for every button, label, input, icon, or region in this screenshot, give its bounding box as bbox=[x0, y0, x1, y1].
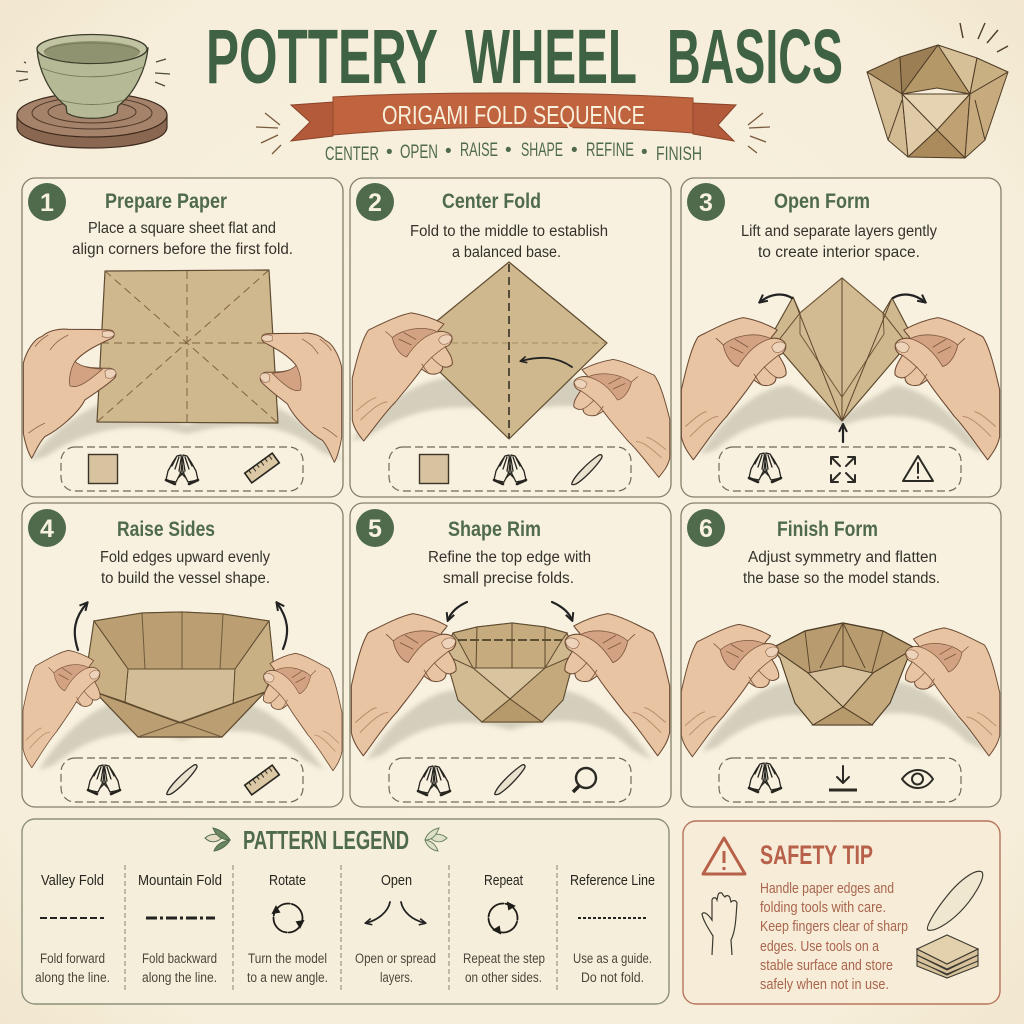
safety text: safely when not in use. bbox=[760, 977, 889, 993]
step number 4 bbox=[28, 509, 66, 547]
panel: step 2 center fold bbox=[350, 178, 671, 497]
icon: bone folder tool bbox=[927, 871, 983, 930]
step keywords: • bbox=[571, 140, 578, 161]
illustration: right hand bbox=[263, 653, 342, 771]
icon: paper stack bbox=[917, 935, 978, 978]
step keywords: • bbox=[641, 142, 648, 163]
tools tray 5 bbox=[389, 758, 631, 802]
ribbon text: ORIGAMI FOLD SEQUENCE bbox=[382, 100, 645, 130]
description 1: Place a square sheet flat and bbox=[88, 220, 276, 237]
step number 6: 6 bbox=[699, 515, 713, 543]
panel: step 6 finish form bbox=[681, 503, 1001, 807]
step number 5: 5 bbox=[368, 515, 382, 543]
step number 6 bbox=[687, 509, 725, 547]
legend item: rotate: Turn the model bbox=[248, 951, 327, 966]
legend item: rotate bbox=[247, 872, 328, 985]
illustration: finished bowl bbox=[772, 623, 915, 725]
icon: hand outline bbox=[702, 893, 737, 955]
legend item: open: Open or spread bbox=[355, 951, 436, 966]
description 1: align corners before the first fold. bbox=[72, 241, 293, 258]
legend item: open: layers. bbox=[380, 970, 413, 985]
step keywords: RAISE bbox=[460, 140, 498, 161]
illustration: right hand bbox=[260, 333, 342, 462]
icon: pot on wheel bbox=[16, 34, 170, 148]
safety text: Handle paper edges and bbox=[760, 881, 894, 897]
tools tray 2 bbox=[389, 447, 631, 491]
legend item: repeat: on other sides. bbox=[465, 970, 542, 985]
safety text: edges. Use tools on a bbox=[760, 939, 880, 955]
illustration: left hand bbox=[681, 318, 786, 460]
panel: step 4 raise sides bbox=[22, 503, 343, 807]
description 2: Fold to the middle to establish bbox=[410, 223, 608, 240]
arrows: shape rim bbox=[448, 602, 572, 620]
step keywords: OPEN bbox=[400, 142, 438, 163]
step number 2: 2 bbox=[368, 189, 382, 217]
legend item: reference line: Do not fold. bbox=[581, 970, 644, 985]
illustration: bowl with rim bbox=[445, 623, 575, 722]
legend item: mountain fold bbox=[138, 872, 222, 985]
title: WHEEL bbox=[465, 14, 637, 100]
legend heading: PATTERN LEGEND bbox=[243, 825, 409, 855]
icon: folded paper vessel bbox=[867, 23, 1008, 158]
legend item: open: Open bbox=[381, 872, 412, 889]
description 5: Refine the top edge with bbox=[428, 549, 591, 566]
description 6: the base so the model stands. bbox=[743, 570, 940, 587]
description 3: Lift and separate layers gently bbox=[741, 223, 937, 240]
description 2: a balanced base. bbox=[452, 244, 561, 261]
icon: leaves left bbox=[205, 828, 230, 851]
illustration: right hand bbox=[895, 318, 1000, 460]
step number 1: 1 bbox=[40, 189, 54, 217]
step keywords: • bbox=[445, 141, 452, 162]
panel: step 5 shape rim bbox=[350, 503, 671, 807]
legend item: open bbox=[355, 872, 436, 985]
illustration: raised bowl bbox=[87, 612, 274, 737]
step number 1 bbox=[28, 183, 66, 221]
icon: leaves right bbox=[425, 828, 447, 851]
ribbon banner bbox=[256, 93, 770, 154]
panel: step 1 prepare paper bbox=[22, 178, 343, 497]
heading: raise sides: Raise Sides bbox=[117, 518, 215, 541]
safety text: stable surface and store bbox=[760, 958, 893, 974]
safety text bbox=[760, 881, 908, 993]
legend item: mountain fold: Fold backward bbox=[142, 951, 217, 966]
illustration: right hand bbox=[574, 359, 670, 477]
illustration: left hand bbox=[352, 313, 452, 441]
description 6: Adjust symmetry and flatten bbox=[748, 549, 937, 566]
step number 5 bbox=[356, 509, 394, 547]
legend item: rotate: to a new angle. bbox=[247, 970, 328, 985]
step number 3: 3 bbox=[699, 189, 713, 217]
step keywords: FINISH bbox=[656, 144, 702, 165]
description 2 bbox=[410, 223, 608, 261]
legend item: repeat bbox=[463, 872, 545, 985]
illustration: left hand bbox=[23, 329, 116, 458]
legend item: mountain fold: along the line. bbox=[142, 970, 217, 985]
title: BASICS bbox=[667, 14, 843, 100]
legend item: repeat: Repeat the step bbox=[463, 951, 545, 966]
description 4: Fold edges upward evenly bbox=[100, 549, 270, 566]
illustration: left hand bbox=[681, 624, 779, 757]
heading: center fold: Center Fold bbox=[442, 190, 541, 213]
heading: finish form: Finish Form bbox=[777, 518, 878, 541]
arrow: fold to center bbox=[521, 358, 572, 367]
step keywords: • bbox=[505, 140, 512, 161]
legend item: reference line: Use as a guide. bbox=[573, 951, 652, 966]
tools tray 4 bbox=[61, 758, 303, 802]
description 1 bbox=[72, 220, 293, 258]
illustration: left hand bbox=[23, 650, 100, 768]
heading: open form: Open Form bbox=[774, 190, 870, 213]
illustration: right hand bbox=[565, 614, 670, 756]
step keywords bbox=[325, 140, 702, 165]
safety text: folding tools with care. bbox=[760, 900, 886, 916]
step keywords: REFINE bbox=[586, 140, 634, 161]
legend item: reference line: Reference Line bbox=[570, 872, 655, 889]
icon: warning triangle bbox=[703, 838, 745, 874]
heading: shape rim: Shape Rim bbox=[448, 518, 541, 541]
tools tray 1 bbox=[61, 447, 303, 491]
description 6 bbox=[743, 549, 940, 587]
step number 3 bbox=[687, 183, 725, 221]
legend item: valley fold: Fold forward bbox=[40, 951, 105, 966]
illustration: opened paper bbox=[770, 278, 913, 421]
arrows: spread out bbox=[760, 295, 925, 442]
illustration: flat square sheet bbox=[97, 270, 278, 423]
legend item: reference line bbox=[570, 872, 655, 985]
legend item: mountain fold: Mountain Fold bbox=[138, 872, 222, 889]
step keywords: CENTER bbox=[325, 144, 379, 165]
heading: prepare paper: Prepare Paper bbox=[105, 190, 227, 213]
safety heading: SAFETY TIP bbox=[760, 840, 873, 870]
legend item: valley fold: Valley Fold bbox=[41, 872, 104, 889]
step keywords: SHAPE bbox=[521, 140, 563, 161]
panel: pattern legend bbox=[22, 819, 669, 1004]
tools tray 6 bbox=[719, 758, 961, 802]
description 4: to build the vessel shape. bbox=[101, 570, 270, 587]
legend item: rotate: Rotate bbox=[269, 872, 306, 889]
legend item: valley fold bbox=[35, 872, 110, 985]
legend item: repeat: Repeat bbox=[484, 872, 524, 889]
illustration: diamond sheet bbox=[410, 262, 607, 439]
description 3 bbox=[741, 223, 937, 261]
illustration: right hand bbox=[905, 628, 1000, 756]
step number 2 bbox=[356, 183, 394, 221]
arrows: raise up bbox=[75, 603, 287, 650]
tools tray 3 bbox=[719, 447, 961, 491]
legend item: valley fold: along the line. bbox=[35, 970, 110, 985]
description 3: to create interior space. bbox=[758, 244, 920, 261]
step keywords: • bbox=[386, 142, 393, 163]
description 5 bbox=[428, 549, 591, 587]
title: POTTERY bbox=[206, 14, 438, 100]
illustration: left hand bbox=[351, 614, 456, 756]
step number 4: 4 bbox=[40, 515, 54, 543]
description 4 bbox=[100, 549, 270, 587]
description 5: small precise folds. bbox=[443, 570, 574, 587]
safety text: Keep fingers clear of sharp bbox=[760, 919, 908, 935]
title bbox=[206, 14, 843, 100]
panel: step 3 open form bbox=[681, 178, 1001, 497]
panel: safety tip bbox=[683, 821, 1000, 1004]
